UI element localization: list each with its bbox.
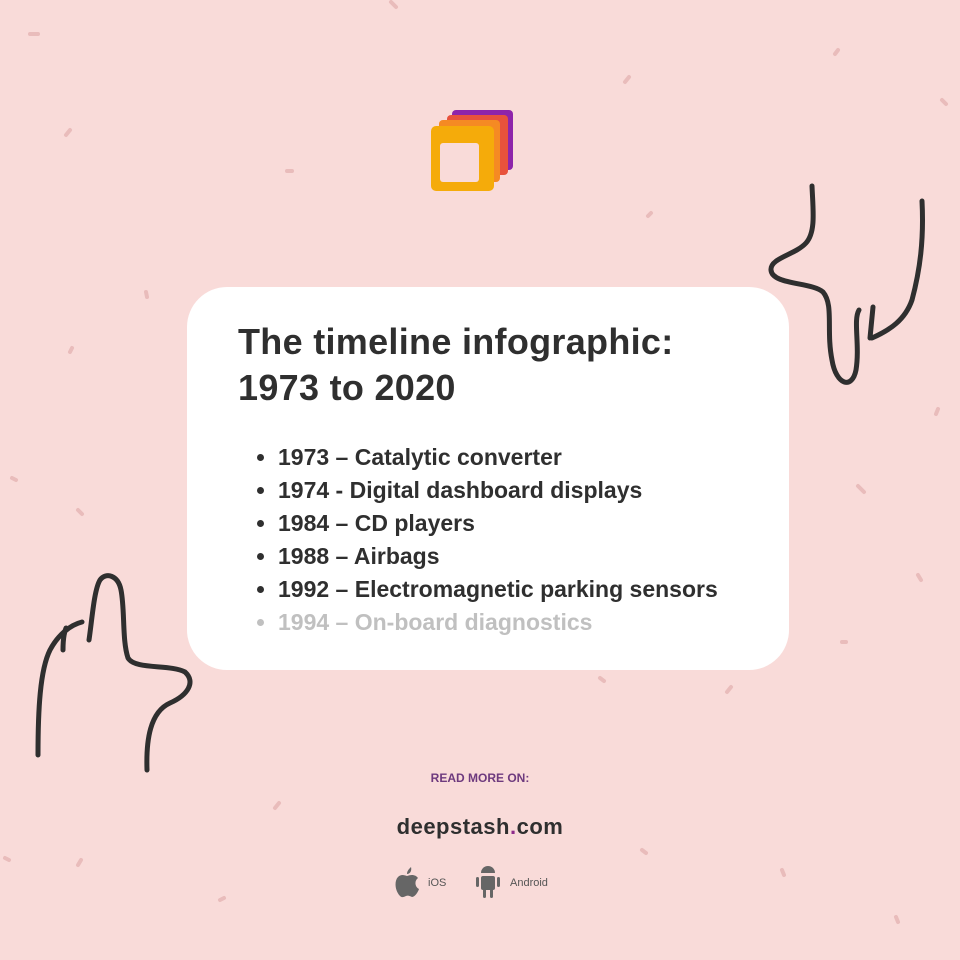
title: The timeline infographic: [238, 321, 674, 362]
card [187, 287, 789, 670]
title: 1973 to 2020 [238, 367, 456, 408]
list: 1974 - Digital dashboard displays [278, 477, 642, 503]
site: deepstash.com [397, 814, 563, 839]
read more: READ MORE ON: [431, 771, 529, 785]
app icons: Android [510, 877, 548, 889]
list: 1988 – Airbags [278, 543, 440, 569]
app icons: iOS [428, 877, 446, 889]
list: 1973 – Catalytic converter [278, 444, 562, 470]
list: 1984 – CD players [278, 510, 475, 536]
list: 1994 – On-board diagnostics [278, 609, 592, 635]
title [238, 321, 674, 408]
logo [431, 110, 513, 191]
app icons [396, 866, 548, 898]
list: 1992 – Electromagnetic parking sensors [278, 576, 718, 602]
list [257, 444, 718, 635]
